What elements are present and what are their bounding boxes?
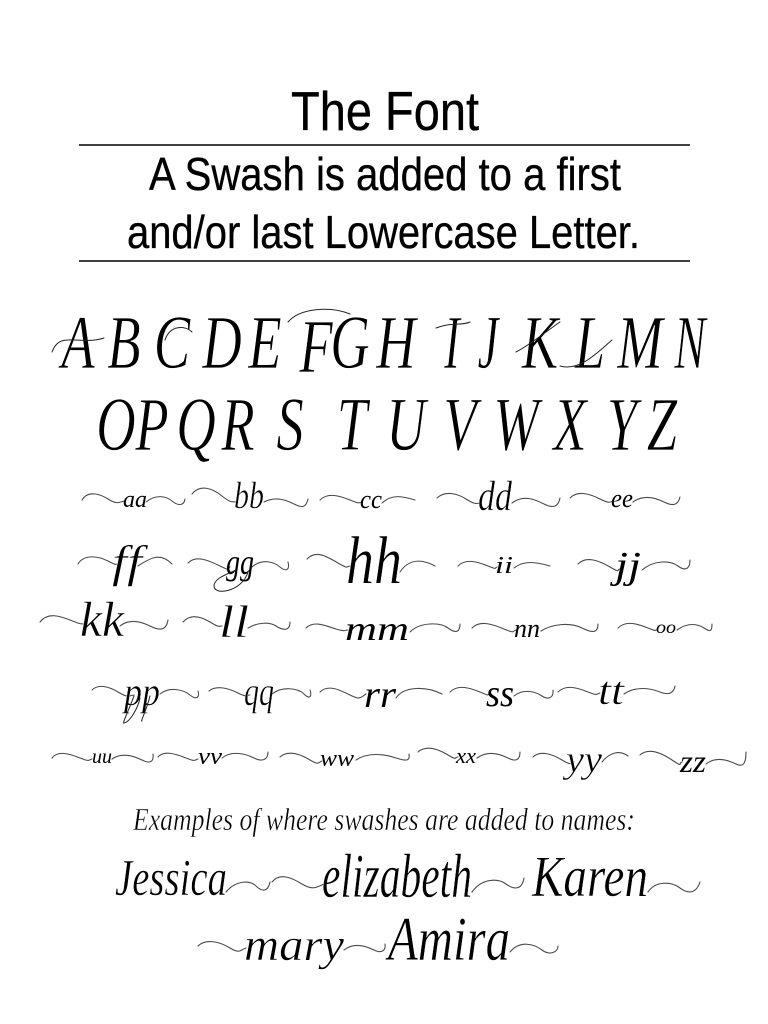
ee: ee bbox=[611, 484, 633, 513]
dd: dd bbox=[478, 474, 513, 520]
uppercase alphabet row 2: Q bbox=[176, 383, 216, 467]
gg: gg bbox=[226, 542, 254, 582]
qq: qq bbox=[244, 669, 274, 714]
yy: yy bbox=[562, 739, 602, 781]
examples caption: Examples of where swashes are added to names: bbox=[132, 801, 635, 837]
uppercase alphabet row 1: D bbox=[201, 301, 242, 385]
jj: jj bbox=[609, 545, 641, 587]
cc bbox=[320, 485, 415, 514]
bb bbox=[192, 475, 308, 517]
mm: mm bbox=[345, 611, 409, 648]
uppercase alphabet row 1 bbox=[52, 301, 709, 389]
nn: nn bbox=[514, 614, 540, 643]
ww bbox=[280, 746, 409, 772]
pp bbox=[92, 669, 199, 723]
subtitle: A Swash is added to a first bbox=[149, 148, 621, 200]
uppercase alphabet row 2: Z bbox=[647, 383, 678, 467]
lowercase row a to e bbox=[82, 474, 680, 520]
lowercase row u to z bbox=[52, 739, 746, 781]
mm bbox=[306, 611, 460, 648]
ff bbox=[78, 536, 172, 587]
qq bbox=[209, 669, 311, 714]
dd bbox=[437, 474, 560, 520]
oo bbox=[618, 617, 712, 637]
tt bbox=[558, 668, 675, 713]
zz: zz bbox=[679, 743, 707, 779]
uppercase alphabet row 1: L bbox=[574, 301, 605, 385]
uppercase alphabet row 1: G bbox=[330, 301, 370, 385]
uppercase alphabet row 1: A bbox=[58, 301, 95, 385]
aa: aa bbox=[123, 487, 147, 513]
example names row 2 bbox=[198, 906, 558, 974]
uppercase alphabet row 1: J bbox=[478, 301, 501, 385]
uppercase alphabet row 1: K bbox=[521, 301, 561, 385]
xx bbox=[418, 743, 520, 768]
mary bbox=[198, 919, 385, 970]
nn bbox=[472, 614, 598, 643]
aa bbox=[82, 487, 185, 513]
uppercase alphabet row 2: R bbox=[220, 383, 255, 467]
uppercase alphabet row 1: C bbox=[154, 301, 191, 385]
uppercase alphabet row 2: Y bbox=[607, 383, 642, 467]
uppercase alphabet row 1: M bbox=[616, 301, 666, 385]
example names row 1 bbox=[115, 843, 700, 911]
uppercase alphabet row 1: N bbox=[674, 301, 709, 385]
gg bbox=[188, 542, 289, 591]
ff: ff bbox=[112, 536, 149, 587]
uppercase alphabet row 1: B bbox=[107, 301, 141, 385]
uppercase alphabet row 1: E bbox=[247, 301, 282, 385]
hh: hh bbox=[346, 522, 402, 598]
ss: ss bbox=[486, 673, 514, 715]
uppercase alphabet row 2: P bbox=[134, 383, 169, 467]
mary: mary bbox=[244, 919, 345, 970]
uppercase alphabet row 2: V bbox=[443, 383, 482, 467]
ee bbox=[570, 484, 680, 513]
ii: ii bbox=[495, 553, 513, 579]
kk bbox=[40, 591, 168, 647]
cc: cc bbox=[360, 485, 382, 514]
pp: pp bbox=[121, 669, 160, 714]
uppercase alphabet row 2 bbox=[96, 383, 678, 467]
zz bbox=[640, 743, 746, 779]
ll bbox=[183, 596, 290, 647]
uu bbox=[52, 746, 153, 768]
rr: rr bbox=[364, 674, 396, 716]
ss bbox=[450, 673, 553, 715]
subtitle bbox=[127, 148, 640, 258]
elizabeth: elizabeth bbox=[322, 843, 472, 911]
yy bbox=[533, 739, 628, 781]
Karen: Karen bbox=[531, 844, 648, 909]
vv bbox=[158, 744, 268, 770]
ii bbox=[458, 553, 550, 579]
lowercase row k to o bbox=[40, 591, 712, 648]
subtitle: and/or last Lowercase Letter. bbox=[127, 206, 640, 258]
uppercase alphabet row 2: T bbox=[337, 383, 371, 467]
tt: tt bbox=[598, 668, 625, 713]
uppercase alphabet row 2: U bbox=[386, 383, 429, 467]
lowercase row p to t bbox=[92, 668, 675, 723]
xx: xx bbox=[455, 743, 476, 768]
Jessica: Jessica bbox=[115, 850, 227, 907]
uppercase alphabet row 1: H bbox=[375, 301, 418, 385]
uppercase alphabet row 2: O bbox=[96, 383, 136, 467]
lowercase row f to j bbox=[78, 522, 690, 598]
Amira: Amira bbox=[385, 906, 510, 974]
ll: ll bbox=[219, 596, 249, 647]
vv: vv bbox=[198, 744, 222, 770]
uppercase alphabet row 2: S bbox=[276, 383, 304, 467]
jj bbox=[578, 545, 690, 587]
uppercase alphabet row 2: X bbox=[551, 383, 589, 467]
bb: bb bbox=[234, 475, 264, 517]
uu: uu bbox=[92, 746, 112, 768]
uppercase alphabet row 2: W bbox=[493, 383, 544, 467]
oo: oo bbox=[656, 617, 676, 637]
uppercase alphabet row 1: F bbox=[298, 305, 333, 389]
ww: ww bbox=[320, 746, 354, 772]
kk: kk bbox=[80, 591, 125, 647]
hh bbox=[307, 522, 435, 598]
uppercase alphabet row 1: I bbox=[443, 301, 462, 385]
rr bbox=[320, 674, 442, 716]
title: The Font bbox=[291, 80, 479, 142]
